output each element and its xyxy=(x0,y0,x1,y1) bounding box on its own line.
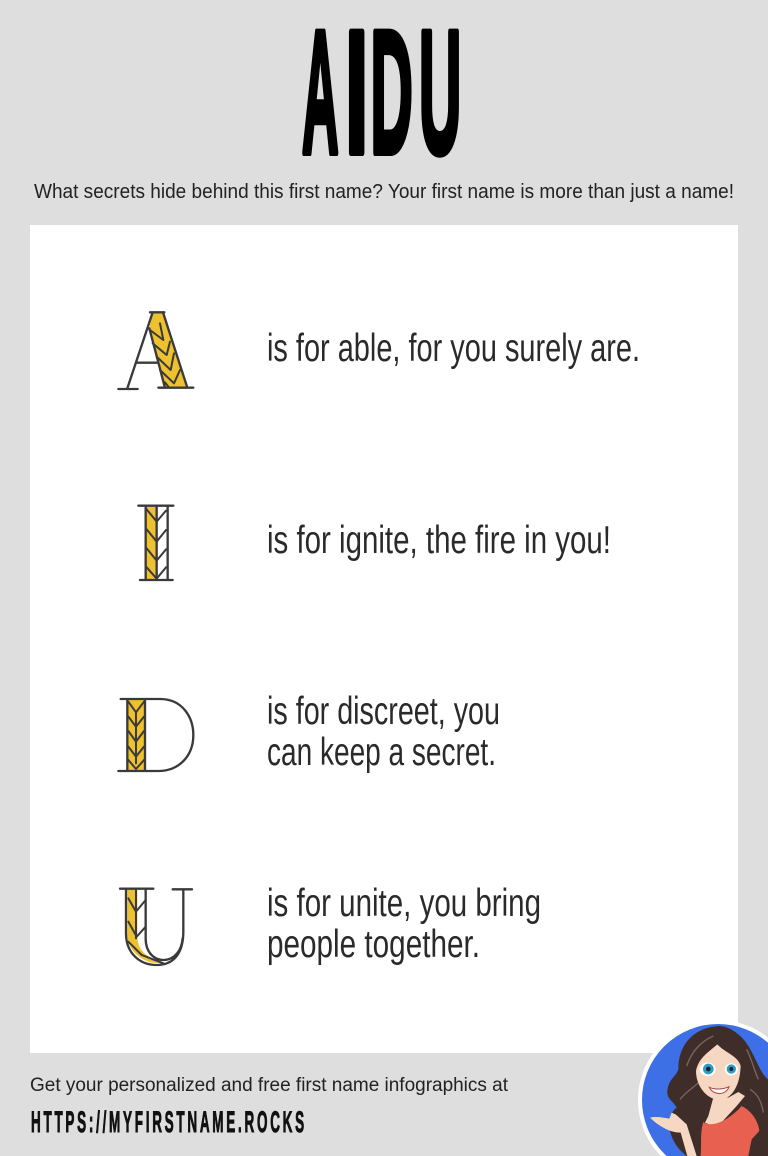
subtitle: What secrets hide behind this first name? Your first name is more than just a name! xyxy=(34,181,734,203)
smile xyxy=(709,1087,729,1094)
hair highlights xyxy=(680,1036,763,1113)
shirt xyxy=(701,1106,759,1156)
arm and hand xyxy=(650,1113,697,1156)
text: D line group: is for discreet, you xyxy=(267,690,500,733)
title: D xyxy=(370,0,413,190)
icon: letter A xyxy=(118,312,193,389)
footer text: Get your personalized and free first name infographics at xyxy=(30,1075,509,1096)
footer url: HTTPS://MYFIRSTNAME.ROCKS xyxy=(31,1105,304,1138)
panel: letters xyxy=(30,225,738,1053)
text: U line group xyxy=(267,882,541,966)
title: I xyxy=(345,0,368,191)
icon: letter D xyxy=(118,699,193,771)
text: A: is for able, for you surely are. xyxy=(267,327,640,370)
icon: letter I xyxy=(138,506,173,580)
title xyxy=(302,0,461,191)
text: U line group: people together. xyxy=(267,923,480,966)
text: U line group: is for unite, you bring xyxy=(267,882,541,925)
title: U xyxy=(419,0,461,190)
text: D line group: can keep a secret. xyxy=(267,731,496,774)
face xyxy=(696,1044,741,1100)
title: A xyxy=(302,0,339,191)
icon: letter U xyxy=(120,889,192,965)
neck and chest xyxy=(705,1092,745,1128)
avatar xyxy=(640,1022,768,1156)
text: D line group xyxy=(267,690,500,774)
eyes xyxy=(700,1063,738,1076)
hair xyxy=(667,1026,768,1156)
text: I: is for ignite, the fire in you! xyxy=(267,519,611,562)
